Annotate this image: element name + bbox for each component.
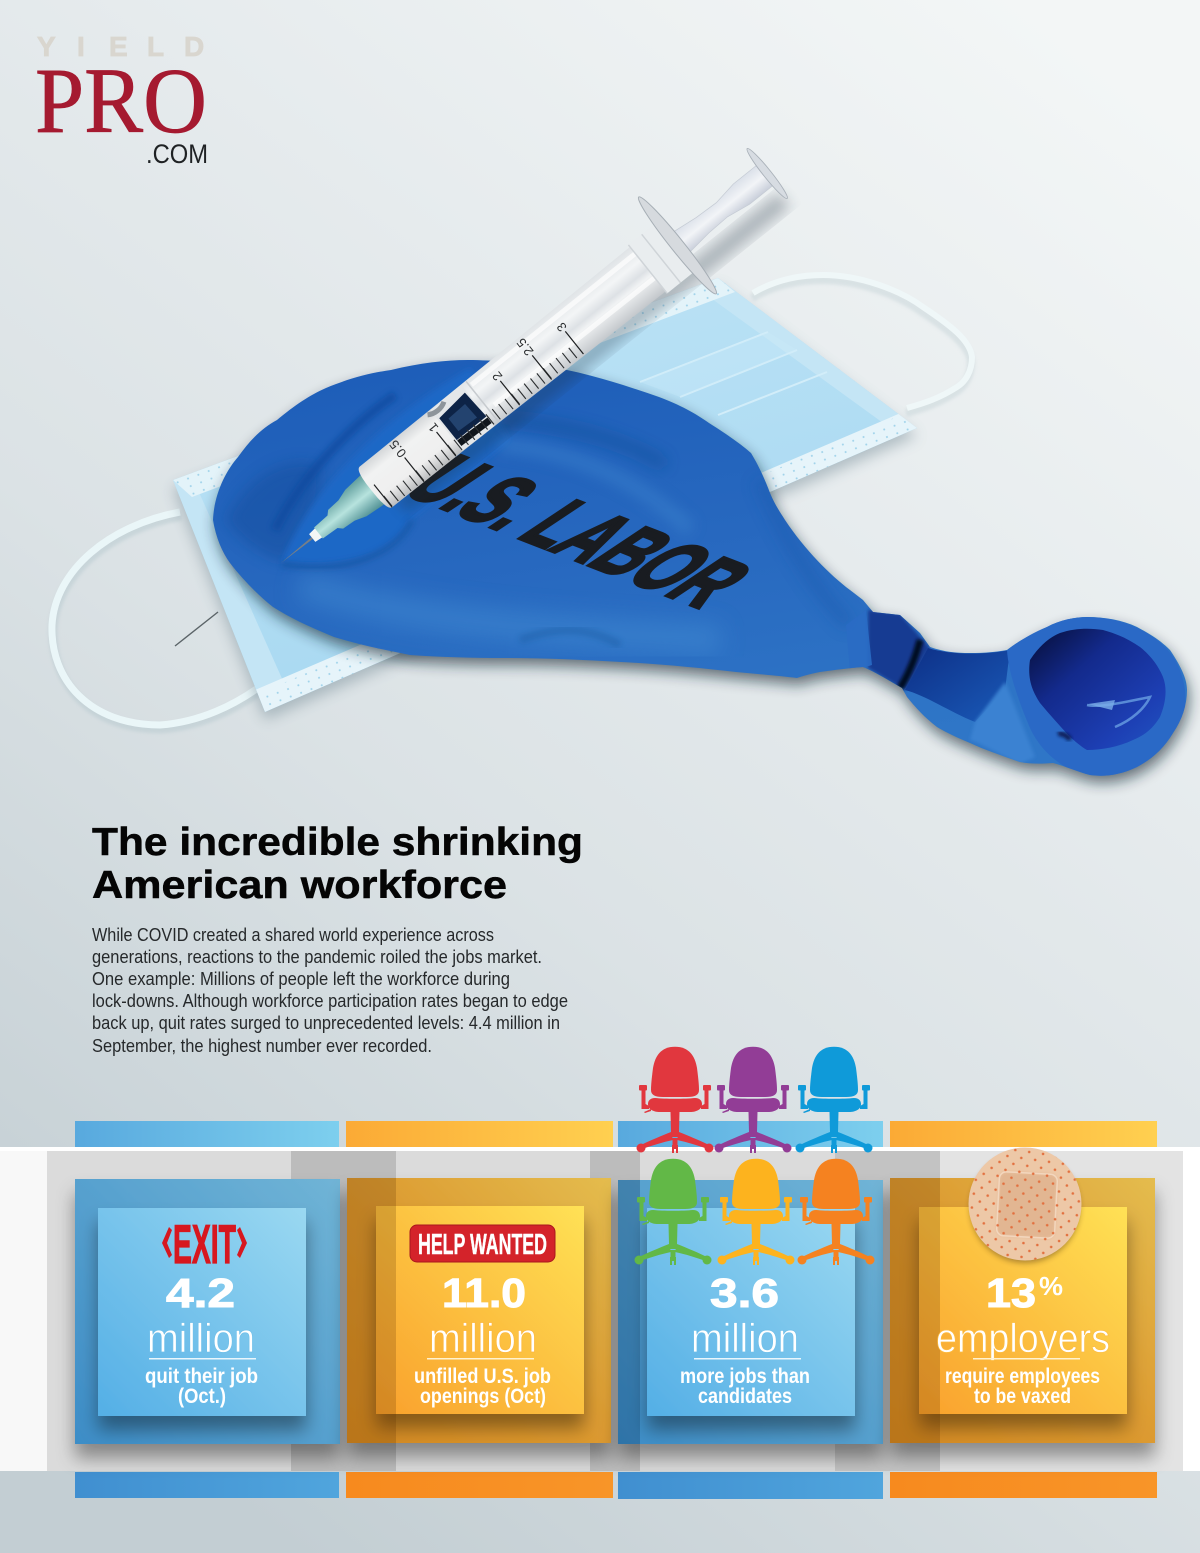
intro paragraph: September, the highest number ever recorded. xyxy=(92,1035,432,1056)
illustration: surgical mask xyxy=(52,275,972,729)
syringe scale: 0.5 xyxy=(386,437,409,461)
icon: help wanted sign xyxy=(410,1225,555,1262)
card 4: employers requiring vaccines: 13 xyxy=(986,1270,1036,1316)
syringe hub xyxy=(307,473,387,548)
syringe barrel front xyxy=(355,404,471,511)
card 2: unfilled job openings: 11.0 xyxy=(442,1270,526,1316)
icon: exit sign xyxy=(162,1213,247,1275)
icon: green chair xyxy=(634,1159,712,1265)
balloon neck xyxy=(905,648,1010,722)
logo: YieldPro.com: I xyxy=(77,31,85,62)
intro paragraph: generations, reactions to the pandemic roiled the jobs market. xyxy=(92,946,542,967)
card 2: unfilled job openings xyxy=(347,1178,611,1443)
headline: The incredible shrinking xyxy=(92,821,583,864)
card 1: quit their job: quit their job xyxy=(145,1365,258,1388)
syringe scale: 1 xyxy=(425,420,441,435)
headline: American workforce xyxy=(92,864,507,907)
card 4: employers requiring vaccines: % xyxy=(1039,1271,1063,1301)
card 2: unfilled job openings: unfilled U.S. job xyxy=(414,1365,551,1388)
icon: help wanted sign: HELP WANTED xyxy=(418,1229,547,1261)
icon: orange chair xyxy=(798,1159,874,1265)
mask side strips xyxy=(174,480,282,690)
card 2: unfilled job openings: million xyxy=(429,1315,537,1361)
icon: red chair xyxy=(636,1047,714,1153)
syringe scale: 2 xyxy=(489,369,505,384)
card 2: unfilled job openings: openings (Oct) xyxy=(420,1385,546,1408)
icon: blue chair xyxy=(796,1047,872,1153)
card 3: more jobs than candidates: 3.6 xyxy=(710,1270,779,1316)
icon: exit sign: EXIT xyxy=(173,1213,236,1275)
card 1: quit their job xyxy=(75,1179,340,1444)
white band with gray panels xyxy=(0,1147,1200,1471)
logo: YieldPro.com: E xyxy=(109,31,128,62)
card 4: employers requiring vaccines xyxy=(890,1178,1155,1443)
card 4: employers requiring vaccines: require employees xyxy=(945,1365,1100,1388)
balloon label: U.S. LABOR: U.S. LABOR xyxy=(382,443,774,621)
card 3: more jobs than candidates xyxy=(618,1180,883,1444)
logo: YieldPro.com: .COM xyxy=(146,139,208,169)
syringe scale: 2.5 xyxy=(513,335,537,359)
card 4: employers requiring vaccines: to be vaxed xyxy=(974,1385,1071,1408)
card 1: quit their job: million xyxy=(147,1315,255,1361)
mask pleats xyxy=(640,332,827,415)
icon: round bandage xyxy=(968,1148,1082,1263)
intro paragraph: lock-downs. Although workforce participation rates began to edge xyxy=(92,990,568,1011)
syringe liquid and stopper xyxy=(426,385,494,454)
card 3: more jobs than candidates: more jobs than xyxy=(680,1365,810,1388)
balloon mouth xyxy=(1007,617,1185,777)
needle tip under balloon xyxy=(175,612,218,646)
syringe needle xyxy=(280,534,317,564)
illustration: deflated blue balloon xyxy=(213,360,1189,783)
card 3: more jobs than candidates: candidates xyxy=(698,1385,792,1408)
intro paragraph: While COVID created a shared world experience across xyxy=(92,924,494,945)
syringe plunger xyxy=(666,163,775,258)
icon: yellow chair xyxy=(718,1159,794,1265)
intro paragraph xyxy=(92,924,568,1056)
intro paragraph: back up, quit rates surged to unprecedented levels: 4.4 million in xyxy=(92,1012,560,1033)
syringe scale xyxy=(360,310,589,507)
logo: YieldPro.com: L xyxy=(147,31,164,62)
mask top and bottom strips xyxy=(173,278,735,497)
headline xyxy=(92,821,583,907)
logo: YieldPro.com: PRO xyxy=(35,50,207,153)
card 1: quit their job: (Oct.) xyxy=(178,1385,226,1408)
logo: YieldPro.com: D xyxy=(184,31,204,62)
syringe scale: 3 xyxy=(554,320,570,335)
balloon folds and highlights xyxy=(225,368,850,645)
bottom color bars xyxy=(75,1472,1157,1499)
balloon knot xyxy=(846,610,930,690)
syringe collar xyxy=(628,222,695,293)
top color bars xyxy=(75,1121,1157,1147)
plunger flange xyxy=(744,146,790,201)
icon: purple chair xyxy=(714,1047,792,1153)
card 1: quit their job: 4.2 xyxy=(166,1270,235,1316)
illustration: syringe xyxy=(242,123,809,611)
card 4: employers requiring vaccines: employers xyxy=(936,1315,1110,1361)
logo: YieldPro.com: Y xyxy=(37,31,56,62)
card 3: more jobs than candidates: million xyxy=(691,1315,799,1361)
barrel flange xyxy=(634,193,721,298)
syringe barrel back xyxy=(436,247,666,446)
intro paragraph: One example: Millions of people left the workforce during xyxy=(92,968,510,989)
